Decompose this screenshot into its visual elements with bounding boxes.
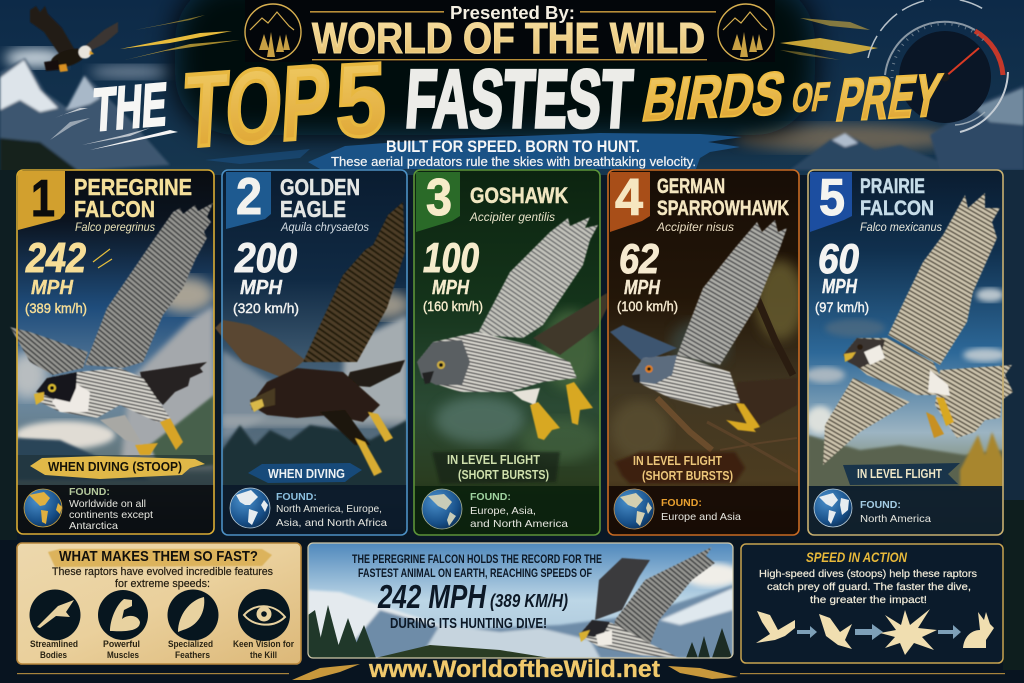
subtitle: BUILT FOR SPEED. BORN TO HUNT. bbox=[386, 138, 640, 156]
panel: card 1 peregrine falcon bbox=[8, 170, 215, 534]
speed condition banner: WHEN DIVING (STOOP) bbox=[48, 459, 182, 474]
arrow 2 bbox=[855, 624, 883, 640]
title: BIRDS: BIRDS bbox=[637, 59, 790, 134]
found text: continents except bbox=[69, 509, 153, 521]
species name: GERMAN bbox=[657, 175, 725, 198]
species name bbox=[280, 174, 360, 222]
feature labels: Specialized bbox=[168, 639, 213, 650]
rank badge 5: 5 bbox=[819, 169, 845, 227]
rank badge 2 bbox=[226, 168, 271, 229]
description: catch prey off guard. The faster the dive, bbox=[767, 581, 971, 593]
found text: FOUND: bbox=[470, 491, 511, 503]
gold speed streaks bbox=[120, 15, 878, 60]
speed: MPH bbox=[31, 277, 74, 299]
icon: powerful muscles bbox=[98, 590, 148, 640]
bird: goshawk bbox=[417, 217, 607, 440]
species name: FALCON bbox=[74, 196, 155, 222]
panel: what makes them so fast bbox=[17, 543, 301, 664]
speed bbox=[423, 234, 483, 314]
bird: peregrine in flight bbox=[579, 547, 715, 658]
icon: specialized feathers bbox=[168, 590, 218, 640]
globe icon bbox=[24, 489, 62, 527]
feature labels: Feathers bbox=[175, 650, 210, 661]
feature labels: Bodies bbox=[40, 650, 67, 661]
globe icon bbox=[422, 489, 462, 529]
panel: card 2 golden eagle bbox=[215, 168, 410, 535]
bird: prairie falcon bbox=[823, 193, 1013, 465]
intro text: These raptors have evolved incredible features bbox=[52, 566, 273, 578]
presenter logo right bbox=[718, 4, 774, 60]
speed condition banner bbox=[615, 452, 745, 484]
found text: Europe, Asia, bbox=[470, 505, 536, 517]
panel: card 3 goshawk bbox=[414, 169, 607, 535]
record text bbox=[352, 552, 602, 632]
panel: speed in action bbox=[741, 544, 1003, 663]
found text: Asia, and North Africa bbox=[276, 517, 387, 529]
speed condition banner: WHEN DIVING bbox=[268, 466, 345, 481]
arrow 1 bbox=[797, 626, 817, 638]
speed: 242 bbox=[25, 234, 86, 281]
feature labels bbox=[30, 639, 294, 661]
found text: Antarctica bbox=[69, 520, 118, 532]
rank badge 1 bbox=[18, 170, 65, 230]
record text: 242 MPH bbox=[377, 578, 487, 615]
white speed streaks bbox=[50, 108, 178, 150]
found text: North America bbox=[860, 513, 931, 525]
heading: WHAT MAKES THEM SO FAST? bbox=[59, 548, 258, 565]
bird: golden eagle bbox=[215, 202, 405, 476]
panel: card 4 german sparrowhawk bbox=[608, 169, 805, 535]
card border bbox=[808, 170, 1003, 535]
rank badge 3 bbox=[416, 169, 460, 232]
title: TOP: TOP bbox=[181, 43, 333, 170]
heading brush bbox=[48, 549, 272, 567]
speed bbox=[25, 234, 87, 316]
heading: SPEED IN ACTION bbox=[806, 549, 908, 565]
arrow 3 bbox=[938, 625, 961, 639]
website: www.WorldoftheWild.net bbox=[368, 656, 660, 683]
description: the greater the impact! bbox=[810, 594, 927, 606]
speed condition banner bbox=[843, 463, 960, 485]
rank badge 4: 4 bbox=[615, 169, 643, 227]
panel: card 5 prairie falcon bbox=[805, 169, 1013, 535]
title: PREY: PREY bbox=[831, 61, 947, 134]
speed: (160 km/h) bbox=[423, 299, 483, 314]
gold rule right bbox=[580, 11, 716, 13]
footer rule right bbox=[740, 673, 1005, 674]
speed: 60 bbox=[818, 235, 859, 282]
title: 5: 5 bbox=[336, 41, 386, 160]
gold rule left bbox=[310, 11, 444, 13]
title: FASTEST: FASTEST bbox=[403, 54, 635, 145]
speed: (97 km/h) bbox=[815, 300, 869, 315]
rank badge 1: 1 bbox=[31, 170, 55, 228]
feature labels: Keen Vision for bbox=[233, 639, 294, 650]
rank badge 2: 2 bbox=[236, 168, 262, 226]
speed condition banner bbox=[30, 456, 205, 479]
found text: Worldwide on all bbox=[69, 498, 146, 510]
speed condition banner: IN LEVEL FLIGHT bbox=[447, 452, 540, 467]
found text: FOUND: bbox=[860, 499, 901, 511]
rank badge 5 bbox=[810, 169, 852, 232]
latin name: Falco mexicanus bbox=[860, 222, 942, 234]
found text: Europe and Asia bbox=[661, 511, 741, 523]
found text: FOUND: bbox=[661, 497, 702, 509]
species name bbox=[860, 175, 934, 220]
latin name: Accipiter nisus bbox=[656, 222, 734, 234]
icon: keen vision bbox=[238, 589, 290, 641]
species name: GOLDEN bbox=[280, 174, 360, 200]
found text: and North America bbox=[470, 518, 568, 530]
description bbox=[759, 568, 977, 606]
globe icon bbox=[230, 488, 270, 528]
footer feather right bbox=[668, 666, 738, 679]
speed ticks bbox=[93, 249, 112, 268]
diagram: bird dive sequence bbox=[756, 609, 994, 655]
speed condition banner bbox=[432, 452, 560, 484]
found text: North America, Europe, bbox=[276, 503, 382, 515]
speed: (320 km/h) bbox=[233, 301, 299, 316]
found text bbox=[69, 486, 153, 532]
speed: (389 km/h) bbox=[25, 301, 87, 316]
species name bbox=[74, 174, 192, 222]
rank badge 4 bbox=[610, 169, 650, 232]
bird: peregrine falcon bbox=[10, 203, 213, 455]
title: OF: OF bbox=[788, 73, 833, 121]
globe icon bbox=[814, 489, 852, 527]
found text bbox=[276, 491, 387, 529]
latin name: Aquila chrysaetos bbox=[280, 222, 369, 234]
globe icon bbox=[614, 489, 654, 529]
speed: MPH bbox=[822, 276, 857, 298]
record text: THE PEREGRINE FALCON HOLDS THE RECORD FOR THE bbox=[352, 552, 602, 566]
presented by: Presented By: bbox=[450, 3, 575, 23]
speed: 62 bbox=[619, 235, 659, 282]
latin name: Accipiter gentilis bbox=[469, 212, 555, 224]
speed: MPH bbox=[432, 277, 469, 299]
intro text: for extreme speeds: bbox=[115, 578, 210, 590]
species name: FALCON bbox=[860, 197, 934, 220]
icon: rabbit bbox=[963, 612, 994, 648]
found text bbox=[860, 499, 931, 525]
presenter logo left bbox=[245, 4, 301, 60]
rank badge 3: 3 bbox=[426, 169, 452, 227]
speed: 200 bbox=[234, 234, 297, 281]
feature labels: the Kill bbox=[250, 650, 277, 661]
feature labels: Muscles bbox=[107, 650, 139, 661]
eagle illustration bbox=[30, 6, 118, 72]
subtitle brush banner bbox=[205, 133, 742, 169]
species name: SPARROWHAWK bbox=[657, 197, 789, 220]
card border bbox=[17, 170, 214, 534]
speed bbox=[815, 235, 869, 315]
bird: sparrowhawk bbox=[610, 220, 797, 432]
species name: PRAIRIE bbox=[860, 175, 925, 198]
speed condition banner bbox=[248, 463, 362, 483]
record text: FASTEST ANIMAL ON EARTH, REACHING SPEEDS OF bbox=[358, 566, 592, 580]
feature labels: Streamlined bbox=[30, 639, 78, 650]
latin name: Falco peregrinus bbox=[75, 222, 155, 234]
species name: PEREGRINE bbox=[74, 174, 192, 200]
record text: DURING ITS HUNTING DIVE! bbox=[390, 616, 547, 632]
panel: record holder callout bbox=[308, 543, 742, 658]
footer feather left bbox=[292, 664, 360, 680]
brand underline bbox=[312, 59, 707, 60]
species name: GOSHAWK bbox=[470, 183, 568, 208]
speed: 100 bbox=[423, 234, 479, 281]
found text: FOUND: bbox=[276, 491, 317, 503]
found text: FOUND: bbox=[69, 486, 110, 498]
title: THE: THE bbox=[91, 69, 169, 144]
title bbox=[91, 41, 947, 170]
speed bbox=[233, 234, 299, 316]
speed condition banner: (SHORT BURSTS) bbox=[458, 467, 549, 482]
footer rule left bbox=[17, 673, 289, 674]
brand name: WORLD OF THE WILD bbox=[312, 14, 705, 63]
icon: streamlined bodies bbox=[30, 590, 80, 640]
found text bbox=[661, 497, 741, 523]
speed: MPH bbox=[624, 277, 660, 299]
species name: EAGLE bbox=[280, 196, 346, 222]
speed: (100 km/h) bbox=[617, 299, 678, 314]
card border bbox=[414, 170, 600, 535]
record text: (389 KM/H) bbox=[490, 591, 568, 611]
speed condition banner: (SHORT BURSTS) bbox=[642, 468, 733, 483]
tagline: These aerial predators rule the skies with breathtaking velocity. bbox=[331, 155, 696, 169]
speed condition banner: IN LEVEL FLIGHT bbox=[857, 466, 942, 481]
icon: impact burst bbox=[880, 609, 937, 655]
speedometer gauge bbox=[868, 0, 1008, 132]
speed bbox=[617, 235, 678, 314]
species name bbox=[657, 175, 789, 220]
icon: diving bird bbox=[819, 614, 852, 649]
description: High-speed dives (stoops) help these raptors bbox=[759, 568, 977, 580]
speed condition banner: IN LEVEL FLIGHT bbox=[633, 453, 722, 468]
icon: soaring bird bbox=[756, 611, 795, 643]
found text bbox=[470, 491, 568, 530]
card border bbox=[608, 170, 799, 535]
card border bbox=[222, 170, 407, 535]
intro text bbox=[52, 566, 273, 590]
feature labels: Powerful bbox=[103, 639, 140, 650]
speed: MPH bbox=[240, 277, 283, 299]
